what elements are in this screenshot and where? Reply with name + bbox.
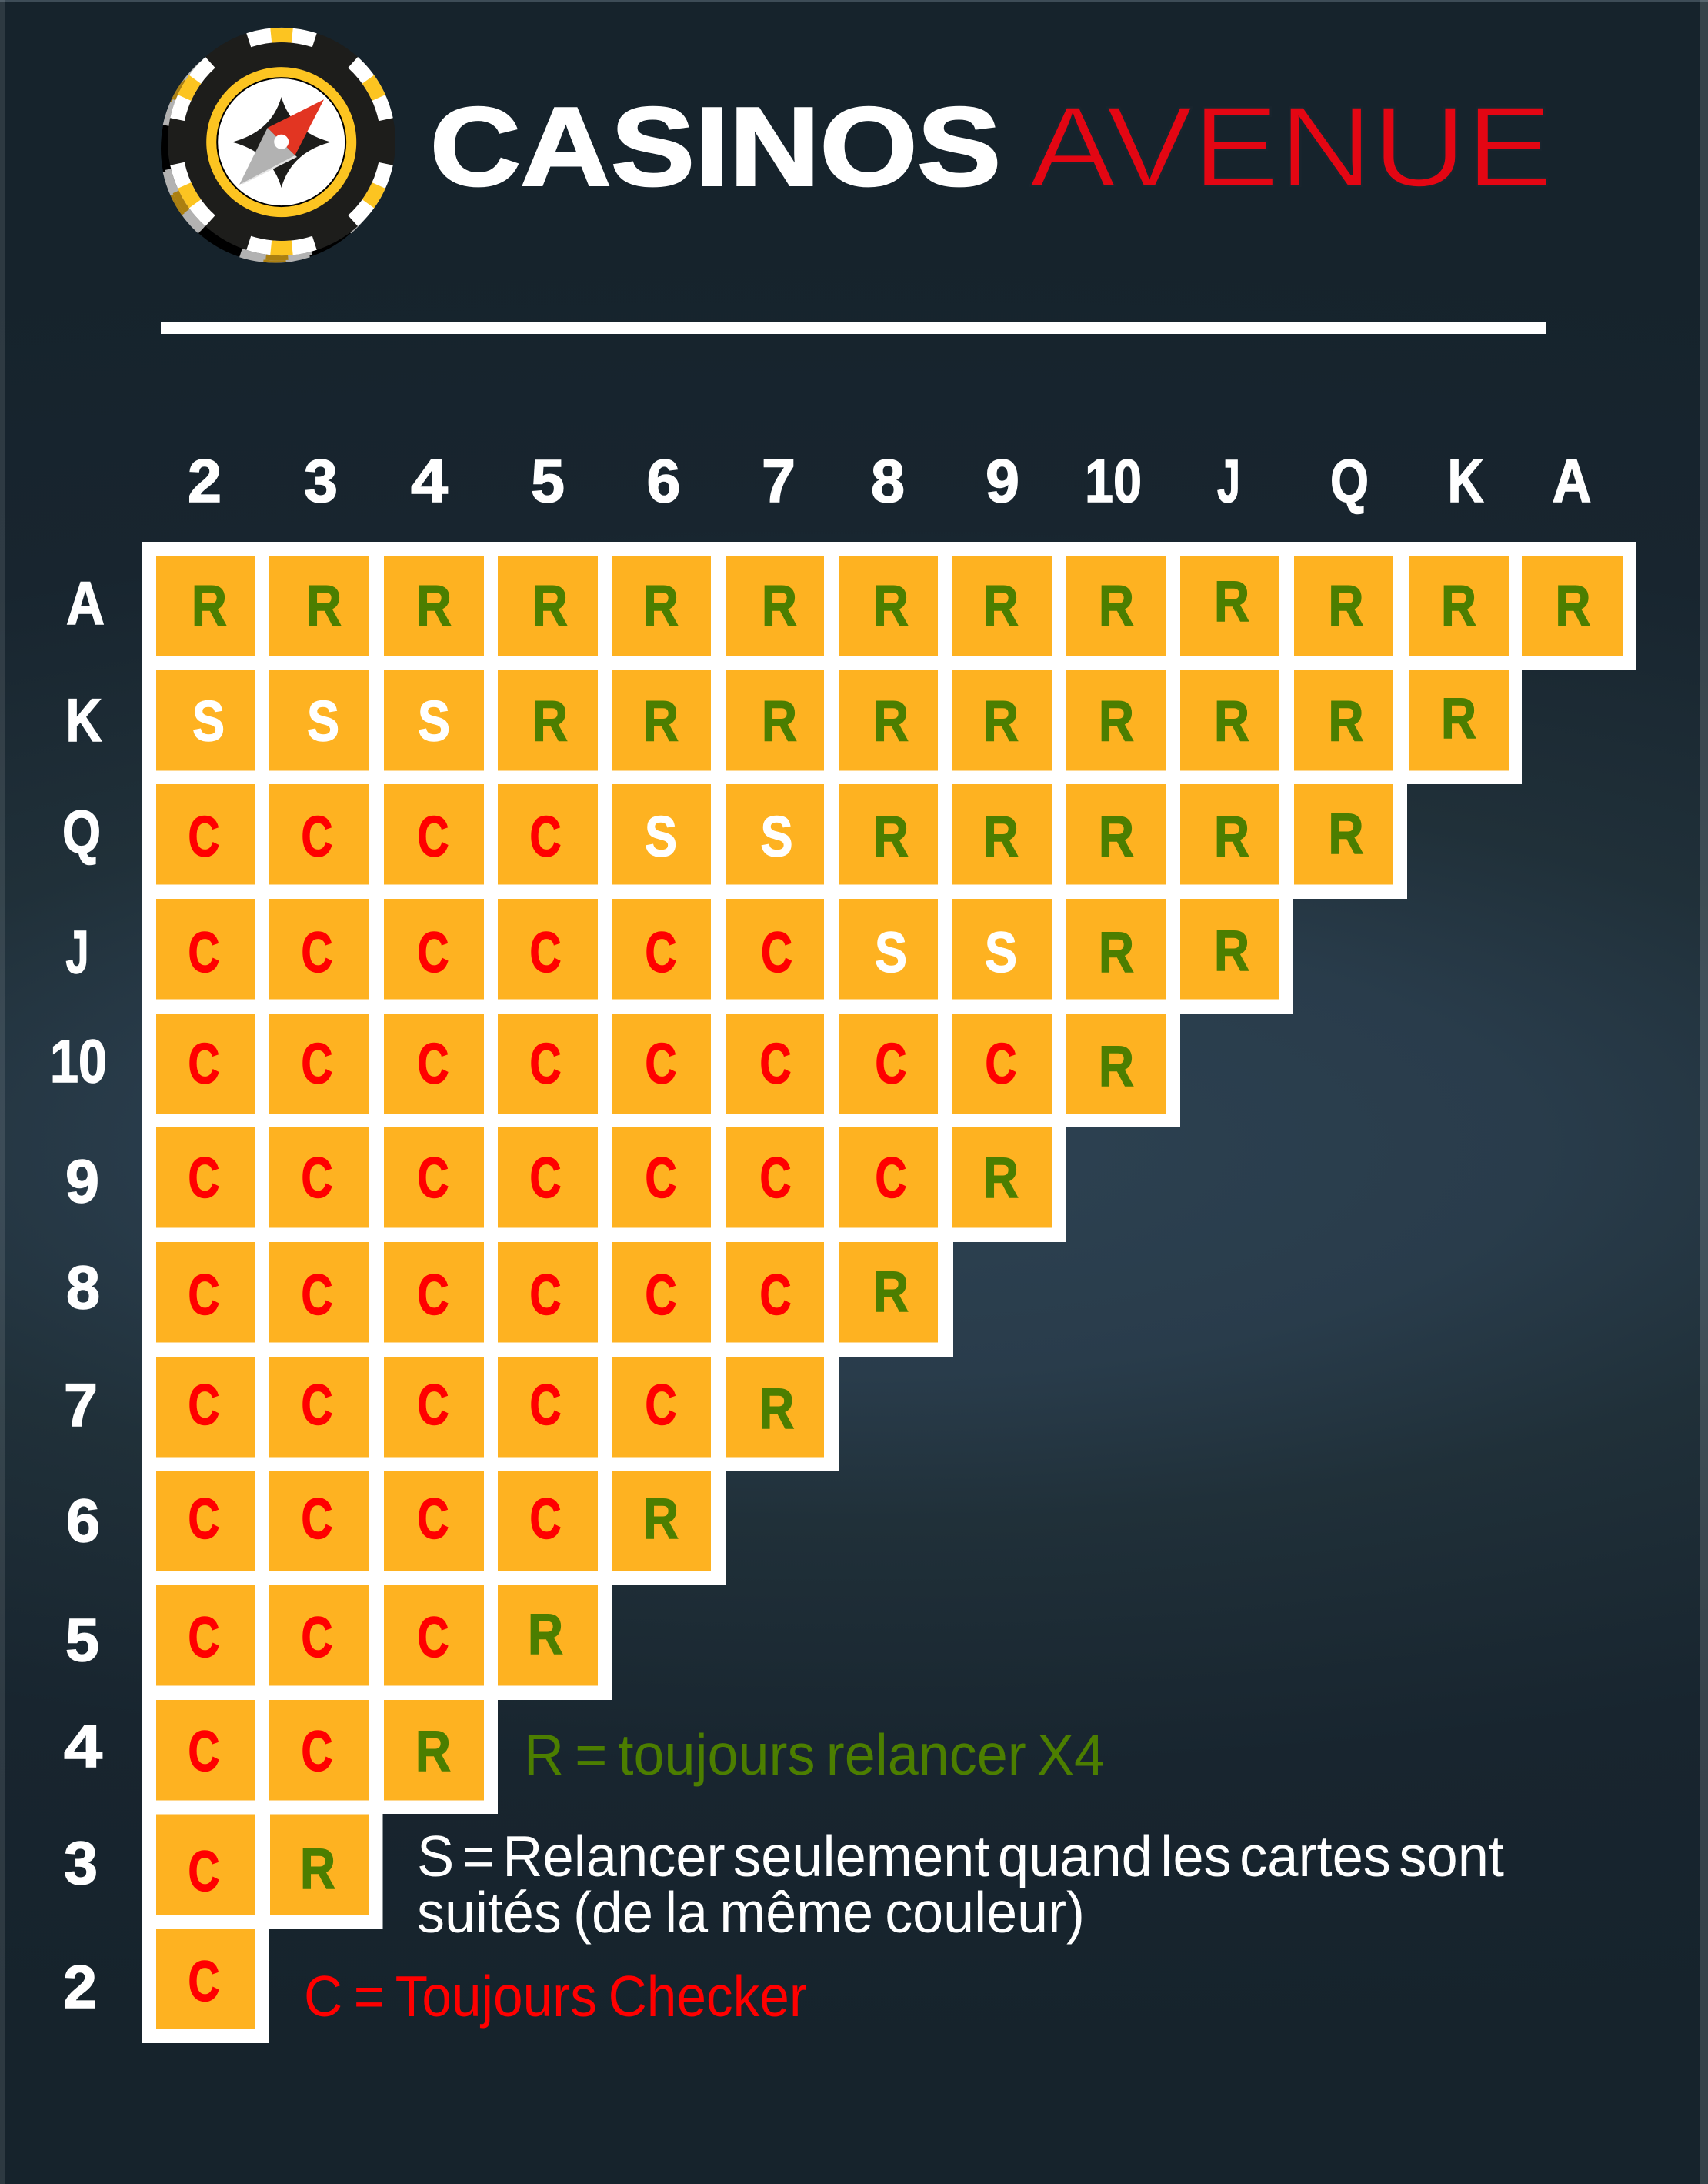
row 10: C [876, 1031, 906, 1096]
column labels: 6 [646, 446, 680, 515]
row 7: C [417, 1373, 449, 1437]
row J: C [302, 920, 332, 984]
row labels: K [66, 686, 102, 754]
row 9: C [645, 1146, 677, 1210]
row A: R [1328, 574, 1363, 637]
row 10: C [645, 1031, 677, 1096]
row 7: C [188, 1373, 220, 1437]
row Q: R [1328, 802, 1363, 866]
row 4: C [188, 1719, 220, 1783]
row Q: C [188, 805, 220, 868]
column labels: K [1448, 446, 1483, 515]
row A: R [1099, 574, 1134, 637]
row 8: C [188, 1263, 220, 1327]
row 5 [156, 1585, 598, 1685]
row 8: C [417, 1263, 449, 1327]
row K: R [1099, 690, 1134, 753]
row K: R [762, 690, 797, 753]
row A: R [1556, 574, 1591, 637]
row 6 [156, 1471, 711, 1571]
chip edge shadow [133, 5, 419, 290]
legend: S: S = Relancer seulement quand les cartes sont [417, 1824, 1504, 1888]
yellow ring [206, 67, 356, 217]
row Q: R [873, 805, 909, 868]
row J: C [529, 920, 562, 984]
row Q: S [645, 805, 677, 868]
legend: R: R = toujours relancer X4 [524, 1722, 1105, 1787]
chip face [168, 28, 395, 255]
row A [156, 556, 1623, 656]
row 10: C [302, 1031, 332, 1096]
row 6: C [302, 1487, 332, 1551]
row 6: C [417, 1487, 449, 1551]
row 9 [156, 1127, 1052, 1228]
row labels: J [66, 917, 89, 986]
row Q: C [417, 805, 449, 868]
row labels [50, 569, 107, 2021]
row K [156, 670, 1509, 771]
row 7 [156, 1357, 824, 1458]
row 7: C [302, 1373, 332, 1437]
row A: R [1441, 574, 1476, 637]
row 10: C [529, 1031, 562, 1096]
compass dial [217, 78, 345, 206]
row 7: C [529, 1373, 562, 1437]
column labels: Q [1330, 446, 1369, 515]
legend: S: suités (de la même couleur) [417, 1880, 1085, 1945]
row K: R [643, 690, 679, 753]
row 9: C [529, 1146, 562, 1210]
row Q: C [302, 805, 332, 868]
row K: R [1214, 690, 1249, 753]
column labels: J [1217, 446, 1240, 515]
column labels: 5 [531, 446, 565, 515]
row J: C [417, 920, 449, 984]
row 3 [156, 1815, 369, 1915]
row J: R [1099, 920, 1134, 984]
column labels: 10 [1085, 446, 1142, 515]
row labels: 5 [65, 1605, 99, 1674]
row Q: S [760, 805, 792, 868]
row 8: C [760, 1263, 791, 1327]
column labels: 7 [762, 446, 796, 515]
row A: R [762, 574, 797, 637]
row 6: R [643, 1487, 679, 1551]
row 8: C [529, 1263, 562, 1327]
row 5: C [188, 1605, 220, 1669]
column labels: A [1553, 446, 1591, 515]
column labels: 4 [411, 446, 448, 515]
row labels: 3 [64, 1828, 98, 1897]
hand chart grid [142, 542, 1636, 2043]
white staircase frame [142, 542, 1636, 2043]
column labels: 2 [188, 446, 222, 515]
row J: S [875, 920, 907, 984]
row A: R [983, 574, 1019, 637]
legend: S [417, 1824, 1504, 1945]
row 6: C [529, 1487, 562, 1551]
compass star [232, 97, 331, 188]
row 8: R [873, 1260, 909, 1324]
row K: S [307, 690, 339, 753]
row 8: C [645, 1263, 677, 1327]
row J: S [985, 920, 1017, 984]
row A: R [643, 574, 679, 637]
row J: C [645, 920, 677, 984]
row 9: C [760, 1146, 791, 1210]
row 6: C [188, 1487, 220, 1551]
row A: R [873, 574, 909, 637]
column labels: 3 [304, 446, 338, 515]
row J [156, 899, 1279, 999]
row 9: C [417, 1146, 449, 1210]
row K: S [418, 690, 450, 753]
row 10 [156, 1014, 1166, 1114]
row 10: C [985, 1031, 1017, 1096]
row labels: 7 [64, 1371, 98, 1439]
row A: R [1214, 569, 1249, 633]
row 2 [156, 1929, 255, 2029]
row 3: R [300, 1837, 335, 1901]
row Q [156, 784, 1393, 885]
row J: C [188, 920, 220, 984]
row J: R [1214, 919, 1249, 983]
row K: R [532, 690, 568, 753]
title: CASINOS: CASINOS [430, 85, 1001, 209]
row 10: C [188, 1031, 220, 1096]
row A: R [306, 574, 342, 637]
row labels: 2 [63, 1952, 97, 2021]
row 4 [156, 1700, 484, 1801]
row 9: R [983, 1146, 1019, 1210]
row K: R [1328, 690, 1363, 753]
header rule [161, 322, 1546, 334]
row J: C [761, 920, 792, 984]
row 7: C [645, 1373, 677, 1437]
row 9: C [188, 1146, 220, 1210]
column labels: 8 [871, 446, 905, 515]
row 8: C [302, 1263, 332, 1327]
row 2: C [188, 1949, 220, 2013]
row Q: R [1214, 805, 1249, 868]
row labels: Q [62, 797, 101, 866]
row 5: R [528, 1602, 563, 1666]
legend: C: C = Toujours Checker [304, 1964, 807, 2029]
row 5: C [302, 1605, 332, 1669]
logo: compass poker chip [133, 1, 422, 290]
column labels: 9 [986, 446, 1019, 515]
row 9: C [302, 1146, 332, 1210]
row 7: R [759, 1377, 794, 1441]
row A: R [192, 574, 227, 637]
row Q: C [529, 805, 562, 868]
row labels: 4 [64, 1711, 102, 1780]
row labels: 10 [50, 1027, 107, 1095]
row 10: R [1099, 1034, 1134, 1098]
row A: R [532, 574, 568, 637]
row 3: C [188, 1839, 220, 1903]
row 10: C [417, 1031, 449, 1096]
row Q: R [983, 805, 1019, 868]
row labels: 6 [66, 1486, 100, 1555]
row K: R [983, 690, 1019, 753]
row 9: C [876, 1146, 906, 1210]
row 4: R [415, 1719, 451, 1783]
row K: R [873, 690, 909, 753]
row labels: A [66, 569, 105, 637]
row 5: C [417, 1605, 449, 1669]
title: AVENUE: AVENUE [1029, 82, 1553, 211]
row A: R [416, 574, 452, 637]
row 4: C [302, 1719, 332, 1783]
chip stripes [141, 1, 422, 282]
column labels [188, 446, 1591, 515]
row 10: C [760, 1031, 791, 1096]
row labels: 9 [65, 1147, 99, 1215]
compass needle [239, 99, 324, 185]
row K: S [192, 690, 225, 753]
row Q: R [1099, 805, 1134, 868]
row K: R [1441, 686, 1476, 750]
row 8 [156, 1242, 938, 1342]
row labels: 8 [66, 1253, 100, 1321]
